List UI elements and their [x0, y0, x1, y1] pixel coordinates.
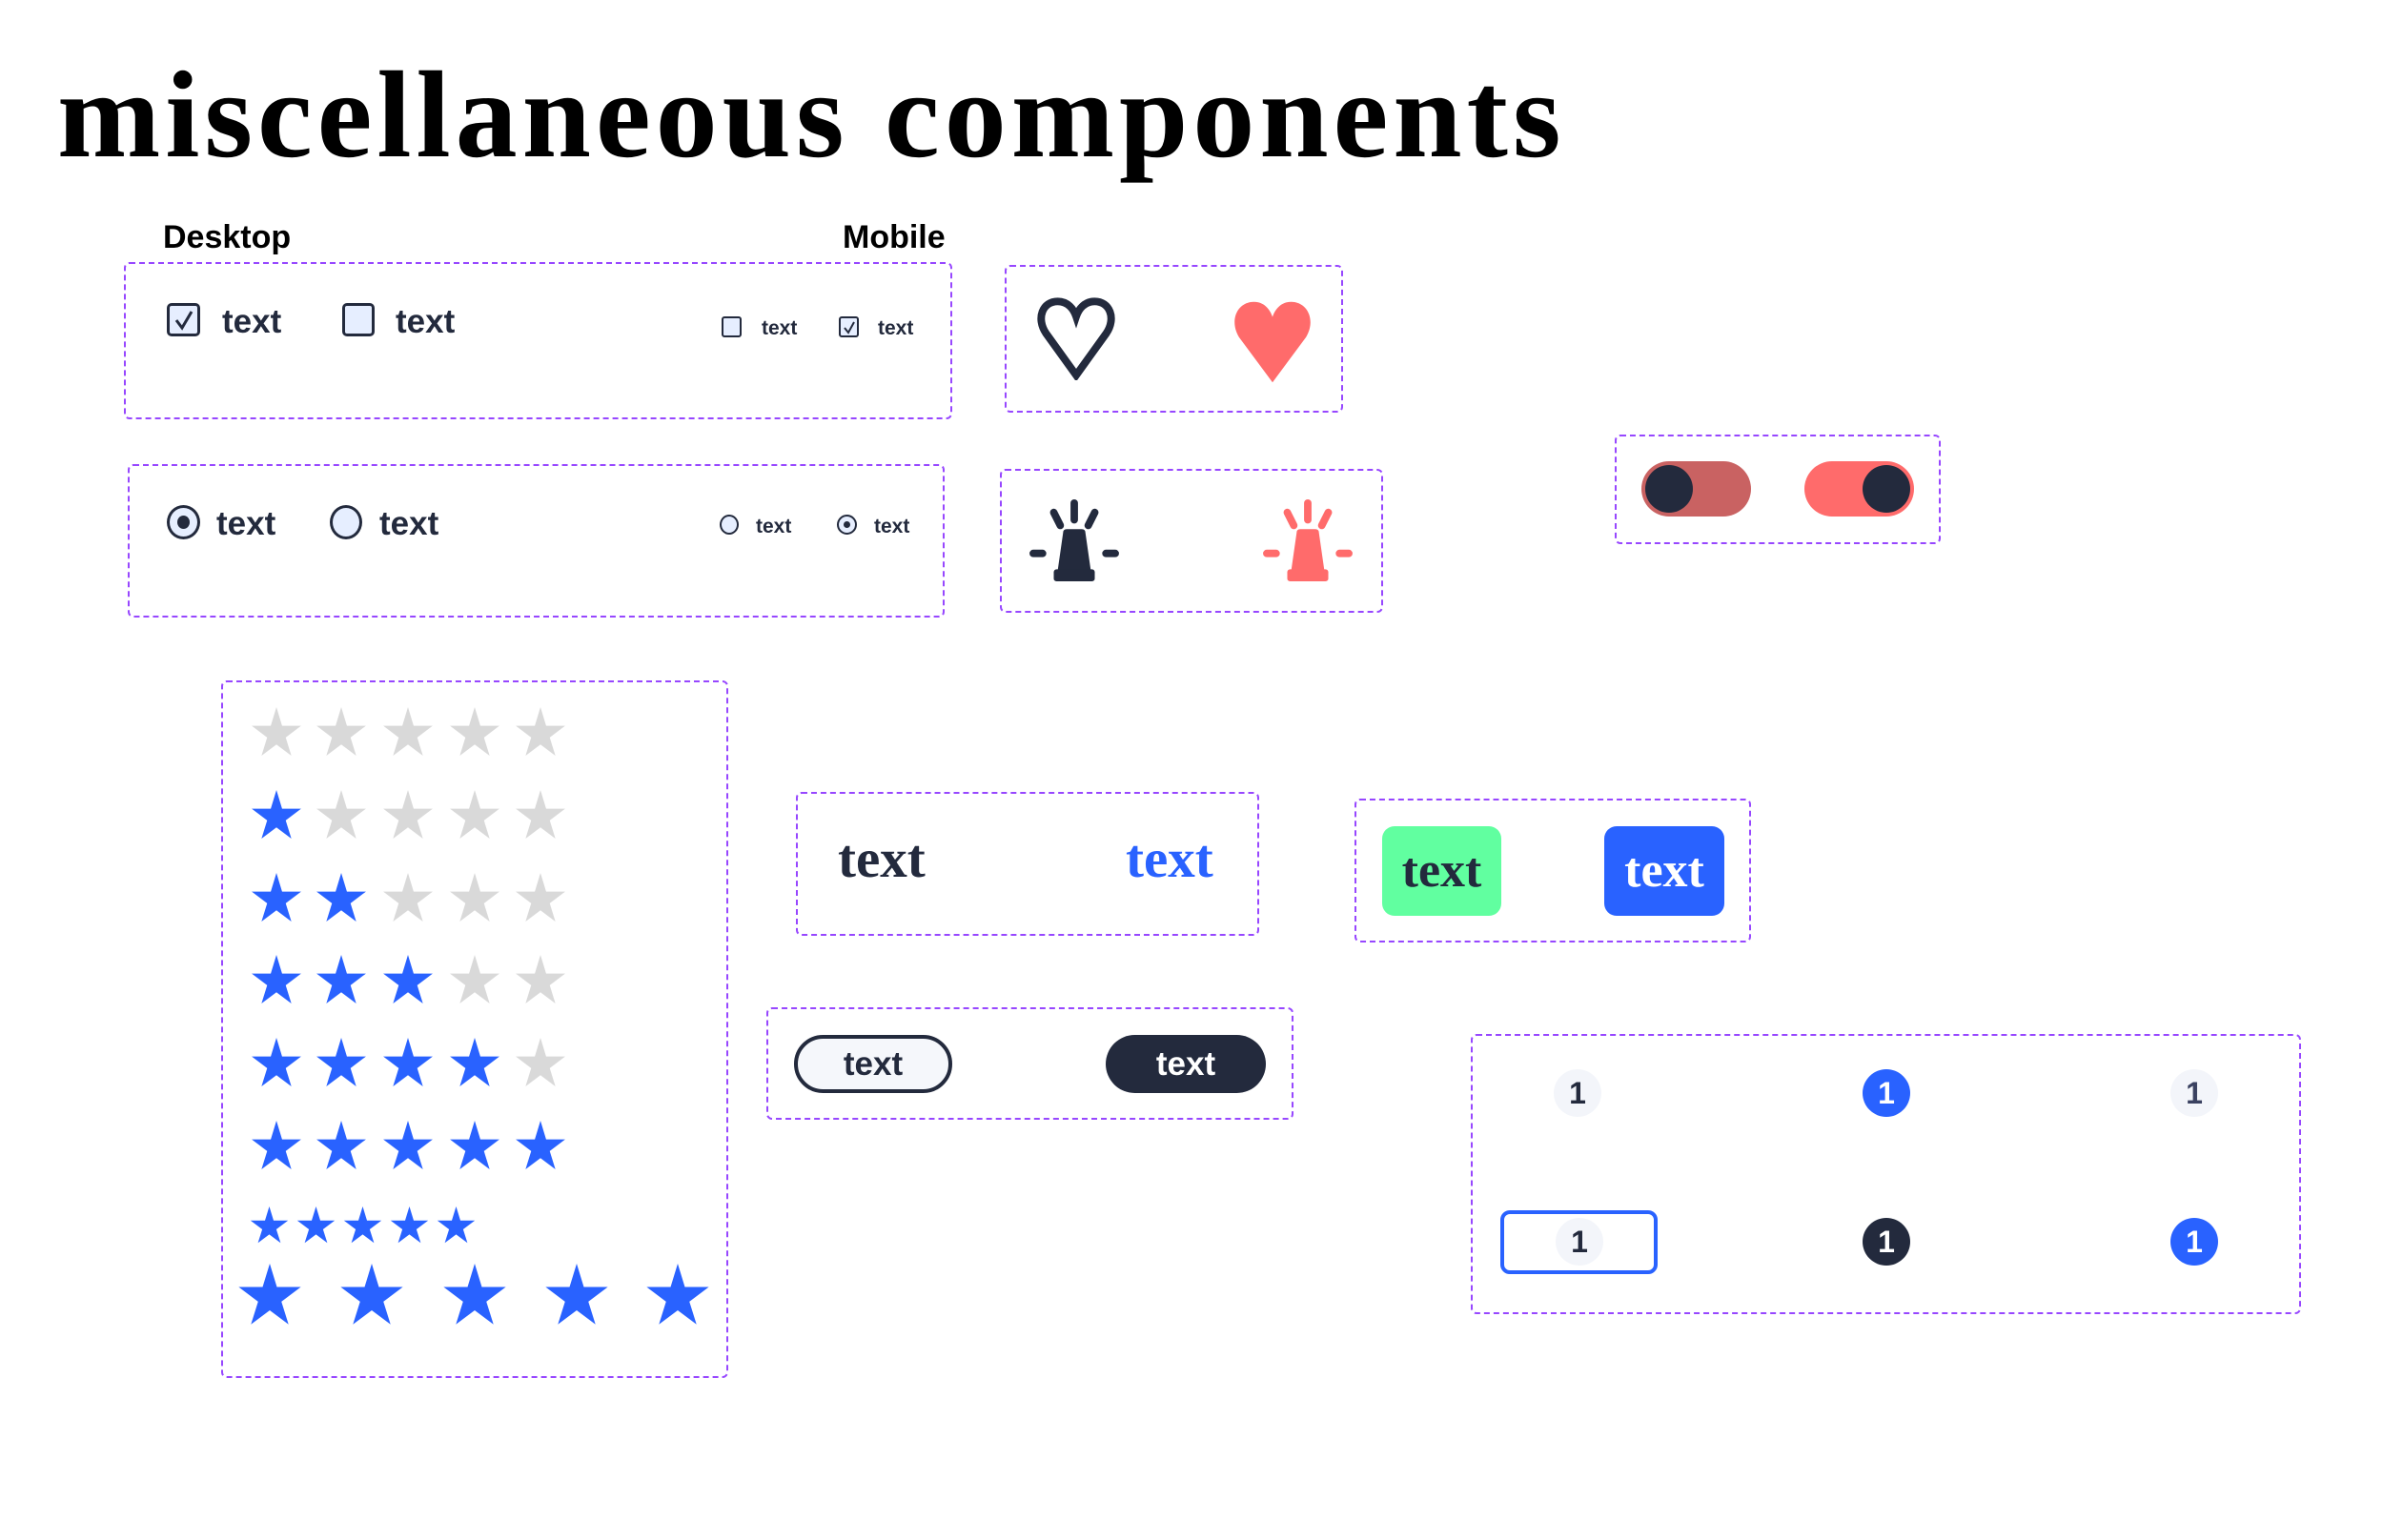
icon: alarm red [1263, 499, 1353, 581]
label: Mobile: Mobile [843, 219, 946, 255]
text: text [379, 505, 438, 542]
pill outline [794, 1035, 952, 1093]
badge blue: text [1624, 843, 1704, 898]
text: text [756, 516, 791, 537]
panel: pills [766, 1007, 1293, 1120]
page active blue: 1 [1878, 1076, 1895, 1110]
page active blue [1863, 1069, 1910, 1117]
text blue: text [1126, 829, 1213, 889]
title: miscellaneous components [57, 47, 1565, 184]
checkbox checked mobile [839, 316, 859, 337]
panel: badges [1354, 799, 1751, 942]
stars row 3 [252, 955, 565, 1003]
page hover: 1 [2186, 1076, 2203, 1110]
pill filled: text [1156, 1045, 1215, 1083]
badge green [1382, 826, 1501, 916]
text: text [396, 303, 455, 340]
radio selected mobile [837, 515, 857, 535]
stars small row [251, 1206, 475, 1243]
badge green: text [1402, 843, 1481, 898]
page focus outline: 1 [1571, 1225, 1588, 1259]
page default: 1 [1569, 1076, 1586, 1110]
stars row 1 [252, 790, 565, 839]
pill outline: text [844, 1045, 903, 1083]
stars row 4 [252, 1038, 565, 1086]
text: text [216, 505, 275, 542]
toggle on [1804, 461, 1914, 517]
radio unselected desktop [330, 505, 362, 539]
radio selected desktop [167, 505, 200, 539]
stars row 2 [252, 873, 565, 922]
stars large row [238, 1264, 709, 1325]
page blue: 1 [2186, 1225, 2203, 1259]
panel: text links [796, 792, 1259, 936]
panel: radios [128, 464, 945, 618]
text: text [762, 317, 797, 339]
stars row 0 [252, 707, 565, 756]
toggle off [1641, 461, 1751, 517]
checkbox unchecked desktop [342, 303, 375, 336]
page dark: 1 [1878, 1225, 1895, 1259]
page blue [2170, 1218, 2218, 1266]
text: text [878, 317, 913, 339]
icon: heart outline [1037, 297, 1115, 380]
stars row 5 [252, 1121, 565, 1169]
badge blue [1604, 826, 1724, 916]
text: text [874, 516, 909, 537]
page default [1554, 1069, 1601, 1117]
panel: hearts [1005, 265, 1343, 413]
text: text [222, 303, 281, 340]
checkbox unchecked mobile [722, 316, 742, 337]
panel: pagination [1471, 1034, 2301, 1314]
page dark [1863, 1218, 1910, 1266]
page focus outline [1500, 1210, 1658, 1274]
checkbox checked desktop [167, 303, 200, 336]
panel: alarms [1000, 469, 1383, 613]
pill filled [1106, 1035, 1266, 1093]
icon: alarm dark [1029, 499, 1119, 581]
text dark: text [838, 829, 926, 889]
page hover [2170, 1069, 2218, 1117]
icon: heart filled [1234, 301, 1311, 383]
panel: star ratings [221, 680, 728, 1378]
radio unselected mobile [720, 515, 739, 535]
panel: checkboxes [124, 262, 952, 419]
panel: toggles [1615, 435, 1941, 544]
label: Desktop: Desktop [163, 219, 291, 255]
